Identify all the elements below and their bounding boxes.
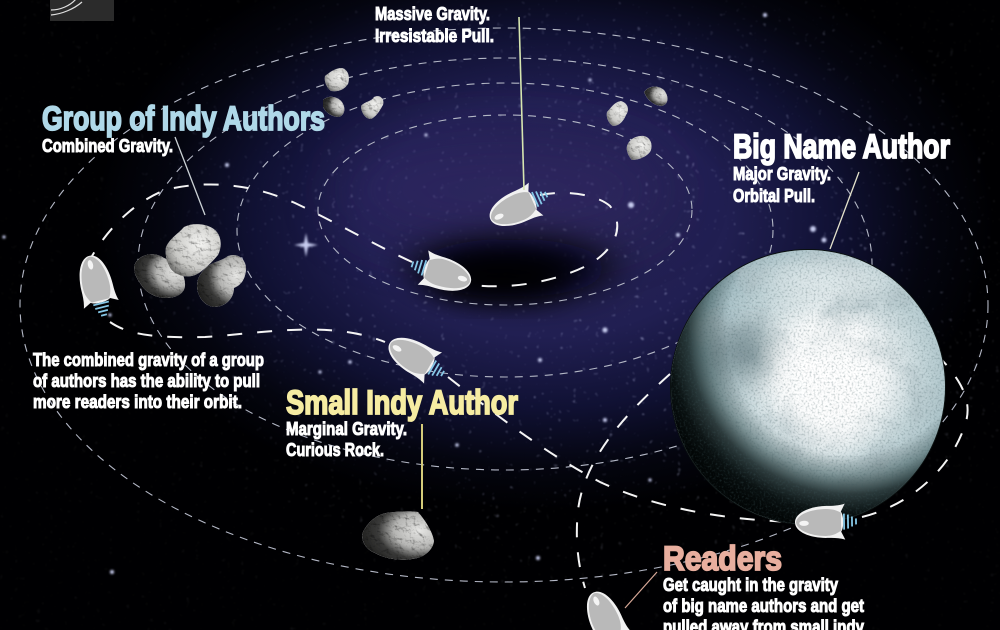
text: massive gravity: Massive Gravity.: [375, 4, 490, 24]
rocket at group of authors: [72, 251, 121, 319]
leader lines: [175, 17, 859, 608]
text: readers description: of big name authors and get: [663, 596, 864, 616]
reader path: [92, 184, 968, 588]
big name author moon: [670, 249, 946, 525]
text: major gravity: [733, 164, 831, 206]
asteroid: curious rock: [362, 511, 434, 560]
text: major gravity: Orbital Pull.: [733, 186, 815, 206]
black hole depression: [340, 135, 670, 306]
text: combined gravity explanation: of authors has the ability to pull: [33, 371, 260, 391]
text: combined gravity explanation: The combined gravity of a group: [33, 350, 264, 370]
asteroids: small top group: [323, 68, 668, 160]
asteroids: group of indy authors: [134, 224, 246, 307]
rocket readers: [577, 585, 635, 630]
heading: group of indy authors: Group of Indy Authors: [42, 100, 325, 138]
rocket at moon: [795, 503, 856, 540]
rocket in black hole: [407, 247, 476, 299]
text: combined gravity: Combined Gravity.: [42, 136, 173, 156]
bright stars: [2, 13, 826, 574]
text: combined gravity explanation: [33, 350, 264, 412]
text: massive gravity: [375, 4, 494, 46]
heading: small indy author: Small Indy Author: [286, 384, 518, 422]
rockets: [72, 178, 856, 630]
text: massive gravity: Irresistable Pull.: [375, 26, 494, 46]
heading: readers: Readers: [663, 540, 782, 578]
rocket near black hole: [483, 178, 553, 236]
text: marginal gravity: Curious Rock.: [286, 440, 384, 460]
text: readers description: Get caught in the gravity: [663, 575, 838, 595]
text: major gravity: Major Gravity.: [733, 164, 831, 184]
logo block: [50, 0, 114, 21]
text: marginal gravity: [286, 419, 407, 460]
text: combined gravity explanation: more readers into their orbit.: [33, 392, 242, 412]
text: readers description: [663, 575, 864, 630]
rocket at small author: [381, 327, 452, 389]
text: marginal gravity: Marginal Gravity.: [286, 419, 407, 439]
